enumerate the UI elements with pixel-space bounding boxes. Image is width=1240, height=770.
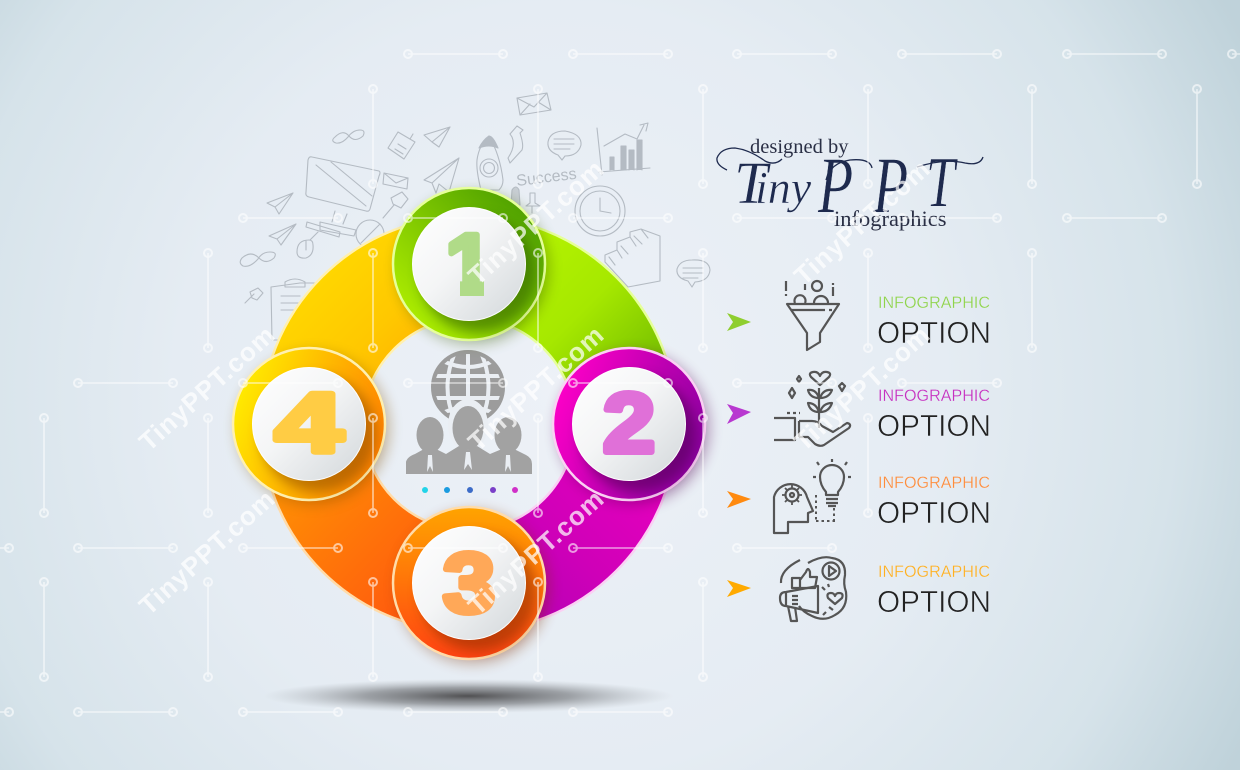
segment: green xyxy=(469,216,677,424)
label: INFOGRAPHIC xyxy=(878,387,990,405)
doodle: infinity loops xyxy=(240,130,364,266)
title: OPTION xyxy=(877,495,991,530)
node 1 xyxy=(393,188,551,346)
watermarks: TinyPPT.com xyxy=(788,319,936,457)
icon: megaphone and social xyxy=(780,557,846,621)
logo: designed by TinyPPT infographics: iny xyxy=(755,162,812,213)
watermarks: TinyPPT.com xyxy=(788,153,936,291)
segment: orange xyxy=(261,424,469,632)
node 2: 2 xyxy=(603,376,655,470)
watermarks: TinyPPT.com xyxy=(462,319,610,457)
watermarks: TinyPPT.com xyxy=(462,153,610,291)
arrow xyxy=(727,404,751,424)
doodle: pins xyxy=(245,192,408,303)
watermarks xyxy=(133,153,936,621)
node 4: 4 xyxy=(275,376,343,470)
doodle: monitor xyxy=(306,157,380,237)
doodle: success text: Success xyxy=(515,166,578,190)
pagination dots xyxy=(422,487,518,493)
doodle: speech bubbles xyxy=(548,131,710,287)
doodle: mouse xyxy=(297,232,318,258)
center hub: people and globe xyxy=(406,352,532,493)
doodle: bar chart xyxy=(597,123,650,175)
logo: designed by TinyPPT infographics: infographics xyxy=(834,206,946,231)
segment: yellow xyxy=(261,216,469,424)
arrow xyxy=(727,313,751,331)
logo: designed by TinyPPT infographics: P xyxy=(872,142,908,230)
icon: globe xyxy=(433,352,503,422)
icon: team of people xyxy=(406,399,532,474)
option 2 xyxy=(727,372,991,446)
floor shadow xyxy=(263,679,673,713)
doodle: note xyxy=(388,132,415,159)
doodle: envelopes xyxy=(383,93,551,189)
label: INFOGRAPHIC xyxy=(878,294,990,312)
option 4 xyxy=(727,557,991,621)
node 1: 1 xyxy=(446,217,492,311)
icon: funnel xyxy=(786,281,839,350)
watermarks: TinyPPT.com xyxy=(462,483,610,621)
icon: plant in hand xyxy=(774,372,850,446)
doodle icons arc xyxy=(240,93,710,340)
doodle: curved arrow xyxy=(508,126,523,163)
option 3 xyxy=(727,459,991,533)
node 3: 3 xyxy=(443,536,495,630)
arrow xyxy=(727,580,751,597)
logo: designed by TinyPPT infographics: T xyxy=(926,142,958,222)
node 2 xyxy=(553,348,711,506)
watermarks: TinyPPT.com xyxy=(133,483,281,621)
node 3 xyxy=(393,507,551,665)
icon: head with bulb xyxy=(774,459,851,533)
title: OPTION xyxy=(877,408,991,443)
title: OPTION xyxy=(877,584,991,619)
doodle: clipboard xyxy=(271,279,318,340)
doodle: no sign xyxy=(356,220,384,248)
watermarks: TinyPPT.com xyxy=(133,319,281,457)
doodle: clock xyxy=(575,186,625,236)
doodle: hat pin xyxy=(511,187,540,213)
logo: designed by TinyPPT infographics xyxy=(717,136,983,231)
label: INFOGRAPHIC xyxy=(878,474,990,492)
arrow xyxy=(727,491,751,508)
logo: designed by TinyPPT infographics: P xyxy=(817,142,853,230)
option 1 xyxy=(727,281,991,350)
doodle: paper planes xyxy=(267,127,459,245)
title: OPTION xyxy=(877,315,991,350)
logo: designed by TinyPPT infographics: T xyxy=(734,150,771,216)
ring diagram xyxy=(233,188,711,665)
logo: designed by TinyPPT infographics: designed by xyxy=(750,136,849,158)
doodle: stairs xyxy=(605,229,660,287)
label: INFOGRAPHIC xyxy=(878,563,990,581)
segment: magenta xyxy=(469,424,677,632)
doodle: rocket xyxy=(477,136,503,190)
node 4 xyxy=(233,348,391,506)
